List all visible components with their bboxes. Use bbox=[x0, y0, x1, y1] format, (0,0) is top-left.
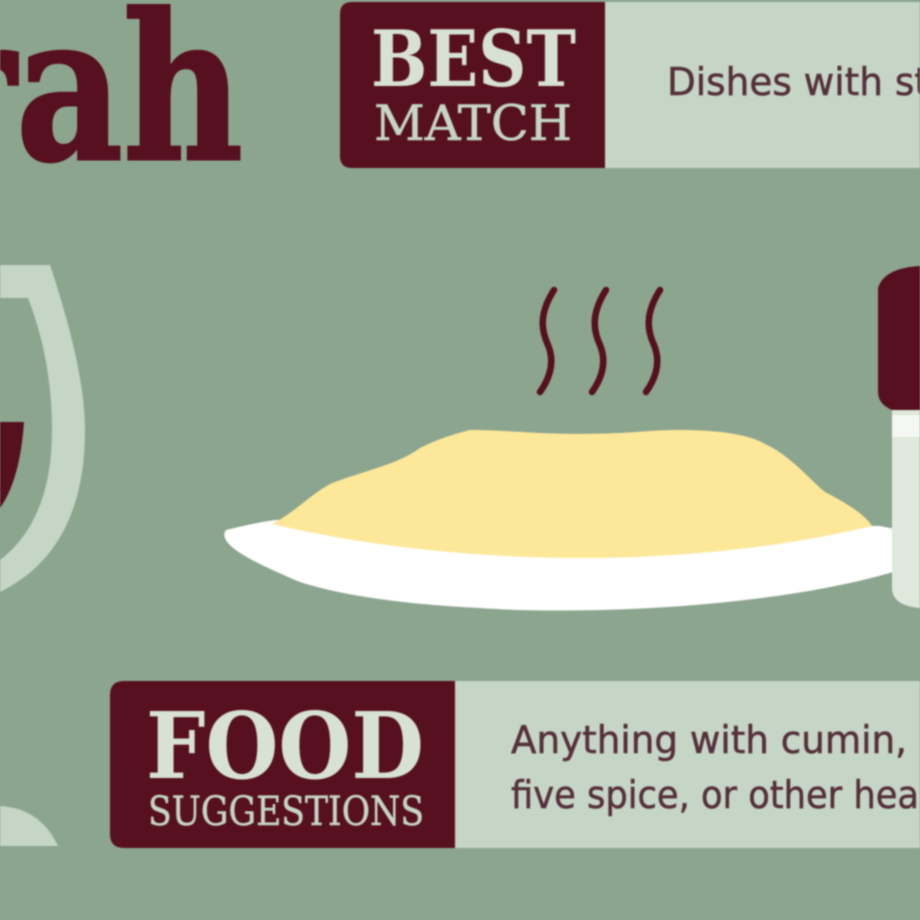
text: food suggestions description: Anything with cumin, bbox=[511, 718, 907, 762]
heading: best: BEST bbox=[371, 14, 576, 105]
heading: suggestions: SUGGESTIONS bbox=[148, 789, 424, 835]
panel: best match bbox=[340, 2, 920, 168]
food bbox=[272, 430, 872, 558]
icon: wine glass bbox=[0, 265, 85, 846]
text: food suggestions description bbox=[511, 718, 919, 817]
icon: shaker bbox=[878, 266, 920, 608]
heading: food: FOOD bbox=[146, 692, 424, 800]
plate bbox=[224, 520, 900, 610]
icon: steam bbox=[540, 290, 660, 392]
panel: food suggestions bbox=[110, 681, 920, 848]
heading: match: MATCH bbox=[374, 95, 572, 152]
icon: plate of food bbox=[224, 430, 900, 610]
